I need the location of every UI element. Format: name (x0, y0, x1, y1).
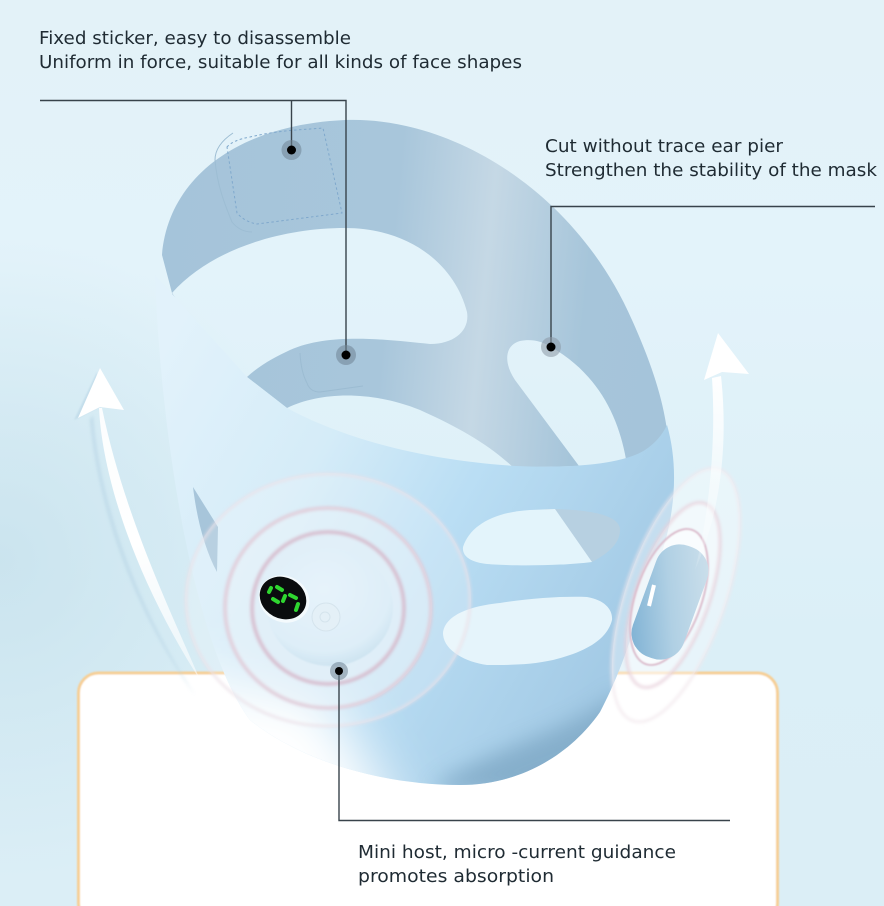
caption: mini host: promotes absorption (358, 866, 554, 887)
fixed sticker patch (215, 128, 342, 232)
host button (312, 603, 340, 631)
host vibration rings (185, 473, 471, 727)
mask front body (155, 275, 674, 785)
white panel (78, 673, 778, 906)
caption: sticker: Fixed sticker, easy to disassemble (39, 28, 351, 49)
leader line: mini host (330, 662, 730, 820)
lower cheek opening (443, 597, 612, 665)
caption: sticker: Uniform in force, suitable for all kinds of face shapes (39, 52, 522, 73)
side pod (624, 537, 716, 667)
upper cheek opening (463, 509, 620, 565)
left arrow (74, 368, 200, 695)
caption: ear pier: Strengthen the stability of the mask (545, 160, 878, 181)
side pod rings (585, 453, 767, 737)
leader line: ear pier (541, 206, 875, 357)
mask back strap (162, 120, 667, 470)
right arrow (695, 333, 749, 570)
caption: mini host: Mini host, micro -current guidance (358, 842, 676, 863)
nose patch (300, 353, 363, 392)
host display (250, 566, 318, 632)
mini host (250, 548, 393, 666)
caption: ear pier: Cut without trace ear pier (545, 136, 784, 157)
leader line: sticker (40, 100, 356, 365)
body shading (130, 487, 620, 830)
